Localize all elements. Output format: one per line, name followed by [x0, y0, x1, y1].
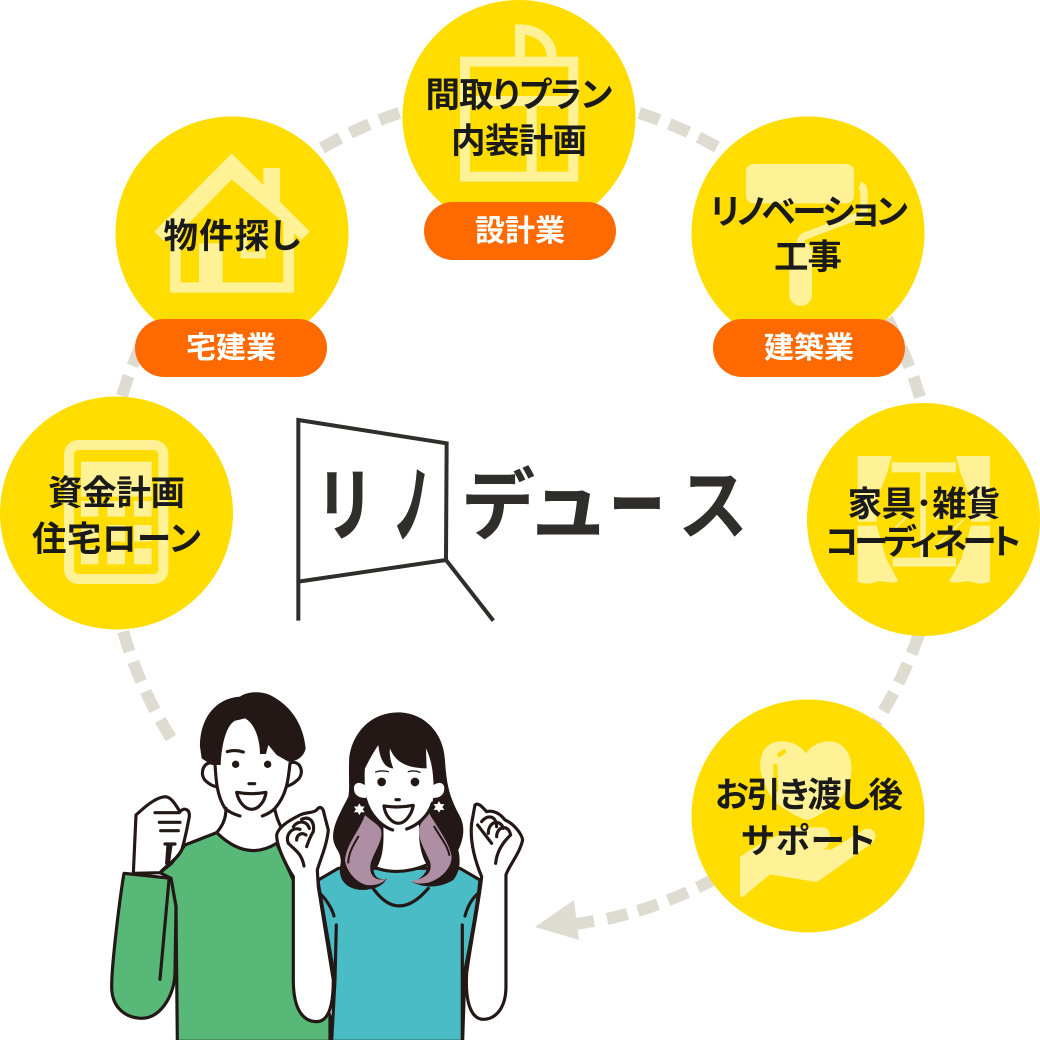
man sleeve [112, 873, 176, 1018]
dashed circular flow arrow [120, 112, 920, 940]
logo text in frame: リ [317, 463, 373, 550]
icon: house [154, 153, 310, 293]
heading: furniture and goods: 家具･雑貨 [848, 486, 1000, 524]
icon: paint roller [746, 164, 864, 306]
step: furniture and goods coordination [807, 403, 1040, 636]
man [112, 692, 330, 1040]
heading: after handover: お引き渡し後 [715, 777, 903, 815]
step: floor plan and interior design [402, 0, 636, 260]
heading: home loan: 住宅ローン [32, 521, 201, 559]
badge: real estate firm [135, 319, 327, 377]
man neck and face fill [215, 747, 290, 840]
heading: financial planning: 資金計画 [48, 475, 185, 513]
woman right fingers [478, 817, 511, 863]
man mouth [237, 792, 266, 809]
woman face [365, 745, 434, 830]
woman shirt [318, 868, 480, 1040]
woman collar [373, 888, 428, 906]
man eyes and brow [227, 751, 271, 784]
icon: calculator [69, 445, 163, 579]
heading: support: サポート [741, 823, 875, 861]
woman left arm [277, 808, 333, 1022]
logo: Renoduce [298, 420, 748, 621]
woman hair strands [348, 827, 449, 863]
illustration: cheering couple [112, 692, 523, 1040]
heading: property search: 物件探し [164, 218, 300, 256]
step: after-sales support [692, 700, 924, 932]
woman back hair [333, 712, 463, 890]
logo text outside frame: ス [678, 463, 748, 550]
man ears [202, 762, 301, 787]
man jaw and neck lines [215, 763, 290, 833]
heading: construction: 工事 [774, 239, 842, 277]
logo text outside frame [461, 459, 748, 551]
woman left fingers [287, 818, 314, 866]
woman tinted hair [345, 812, 452, 885]
logo text outside frame: デ [461, 463, 535, 550]
step: renovation work [692, 116, 924, 377]
man shirt [160, 833, 330, 1040]
logo frame [298, 420, 493, 621]
woman sleeve lines [320, 893, 478, 1040]
logo text in frame: ノ [396, 463, 428, 550]
heading: floor plan: 間取りプラン [426, 77, 612, 115]
woman jaw lines [366, 800, 432, 830]
logo text in frame [317, 463, 428, 550]
man fingers [155, 813, 180, 863]
man fist [133, 797, 189, 873]
heading: interior design: 内装計画 [451, 123, 587, 161]
heading: coordinate: コーディネート [825, 523, 1021, 562]
badge: construction firm [713, 319, 905, 377]
woman [277, 712, 523, 1040]
heading: renovation: リノベーション [710, 194, 908, 232]
logo text outside frame: ュ [525, 459, 611, 551]
logo text outside frame: ー [609, 463, 665, 550]
man hair [200, 692, 306, 765]
icon: floor plan [465, 29, 573, 177]
woman neck [375, 823, 428, 871]
step: property search [116, 116, 348, 377]
woman ears [352, 781, 446, 799]
badge: construction firm: 建築業 [764, 332, 854, 365]
woman eyes and brows [376, 771, 420, 800]
woman earrings [353, 800, 445, 816]
badge: design firm [424, 202, 616, 260]
badge: design firm: 設計業 [475, 215, 565, 248]
woman right arm [466, 804, 523, 1019]
step: financing [0, 396, 233, 630]
woman mouth [384, 805, 413, 823]
icon: curtains and window [858, 456, 990, 584]
icon: heart in hand [740, 741, 875, 897]
badge: real estate firm: 宅建業 [186, 332, 276, 365]
